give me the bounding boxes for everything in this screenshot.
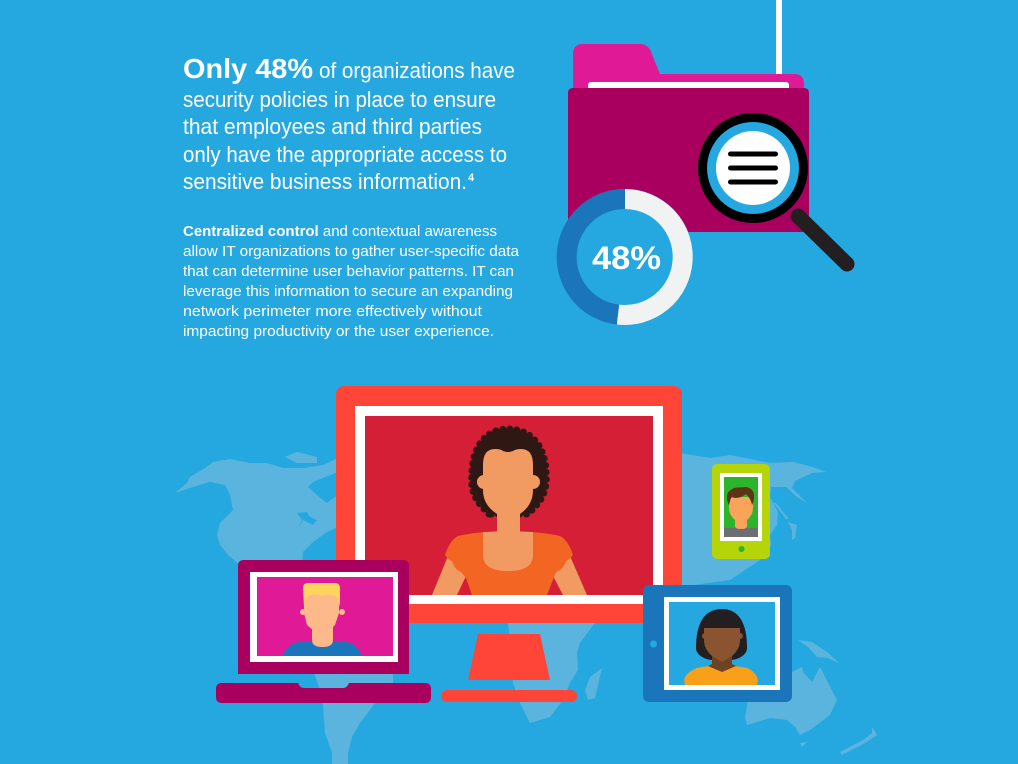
person: blond man [282, 583, 362, 656]
heading text [183, 53, 515, 194]
heading text: only have the appropriate access to [183, 142, 507, 167]
heading text: Only 48% [183, 53, 313, 84]
heading text: of organizations have [319, 58, 515, 83]
monitor stand [468, 634, 550, 680]
monitor [336, 386, 682, 702]
laptop [216, 560, 431, 703]
donut chart: 48%: 48% [592, 240, 661, 276]
world map [175, 452, 877, 764]
icon: folder [568, 44, 809, 232]
heading text: sensitive business information. [183, 169, 467, 194]
person: woman with curly hair [432, 429, 587, 595]
heading text: security policies in place to ensure [183, 87, 496, 112]
person: man with brown hair [724, 487, 758, 537]
body text: impacting productivity or the user experience. [183, 324, 494, 340]
icon: magnifying glass [698, 113, 847, 264]
body text [183, 224, 520, 340]
body text: that can determine user behavior patterns. IT can [183, 264, 514, 280]
heading text: 4 [468, 172, 475, 184]
smartphone [712, 464, 770, 559]
donut chart: 48% [557, 189, 693, 325]
monitor base [441, 690, 577, 702]
heading text: that employees and third parties [183, 114, 482, 139]
body text: Centralized control and contextual awareness [183, 224, 497, 240]
person: woman with dark hair [684, 609, 758, 685]
body text: network perimeter more effectively without [183, 304, 482, 320]
tablet [643, 585, 792, 702]
body text: allow IT organizations to gather user-specific data [183, 244, 520, 260]
connector line [776, 0, 782, 76]
body text: leverage this information to secure an expanding [183, 284, 513, 300]
